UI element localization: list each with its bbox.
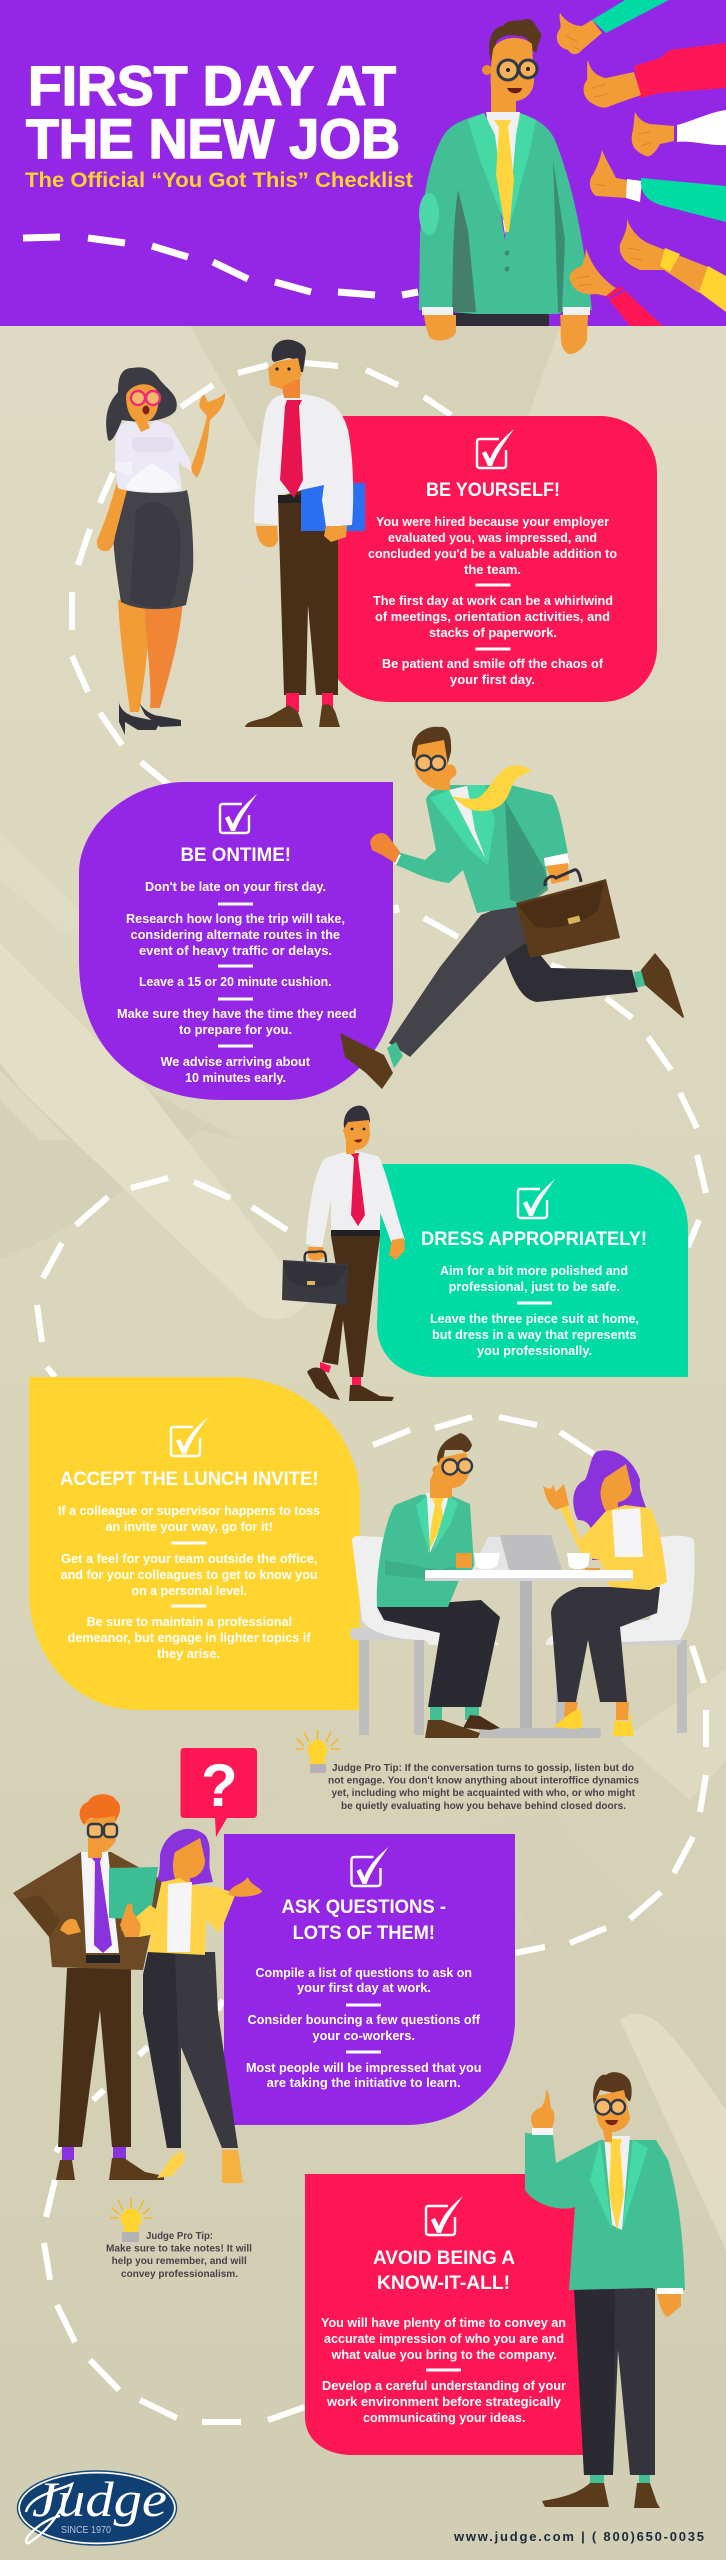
man with orange hair and woman colleague [13, 1794, 262, 2183]
body text: considering alternate routes in the [130, 928, 340, 942]
body text: demeanor, but engage in lighter topics if [68, 1631, 311, 1645]
body text [246, 1966, 482, 2090]
body text: You will have plenty of time to convey an [321, 2316, 566, 2330]
body text [321, 2316, 566, 2425]
body text: your co-workers. [312, 2029, 415, 2043]
laptop [500, 1535, 562, 1570]
heading [373, 2247, 515, 2294]
body text: an invite your way, go for it! [106, 1520, 273, 1534]
table [520, 1580, 532, 1730]
body text [368, 515, 617, 687]
question mark speech bubble [180, 1748, 257, 1837]
icon: checkbox [220, 794, 257, 833]
body text: work environment before strategically [326, 2395, 561, 2409]
running man with briefcase [340, 727, 684, 1089]
body text: Compile a list of questions to ask on [256, 1966, 472, 1980]
body text: communicating your ideas. [363, 2411, 526, 2425]
icon: checkbox [352, 1847, 388, 1886]
man at table [377, 1600, 500, 1707]
icon: lightbulb [110, 2198, 152, 2242]
body text: what value you bring to the company. [330, 2348, 557, 2362]
panel: dress appropriately [377, 1164, 688, 1377]
body text: stacks of paperwork. [429, 626, 557, 640]
judge logo: SINCE 1970 [61, 2524, 111, 2536]
body text: Be patient and smile off the chaos of [382, 657, 604, 671]
header man hands [424, 315, 588, 354]
body text: Don't be late on your first day. [145, 880, 326, 894]
body text: and for your colleagues to get to know you [61, 1568, 318, 1582]
body text: Research how long the trip will take, [126, 912, 345, 926]
heading: LOTS OF THEM! [293, 1922, 435, 1944]
header dashed path [23, 237, 418, 295]
header banner [0, 0, 726, 326]
body text: your first day. [450, 673, 535, 687]
woman at table [551, 1587, 660, 1702]
footer contact: www.judge.com | ( 800)650-0035 [453, 2529, 704, 2544]
tip text: be quietly evaluating how you behave behind closed doors. [341, 1800, 626, 1812]
heading: AVOID BEING A [373, 2247, 515, 2269]
icon: lightbulb [296, 1730, 340, 1773]
icon: checkbox [477, 429, 514, 468]
icon: checkbox [426, 2196, 463, 2235]
body text: Consider bouncing a few questions off [248, 2013, 481, 2027]
tip text: not engage. You don't know anything about interoffice dynamics [328, 1774, 639, 1786]
body text: Leave a 15 or 20 minute cushion. [139, 975, 332, 989]
body text [117, 880, 356, 1085]
man with blue folder [245, 340, 365, 727]
body text: the team. [464, 563, 521, 577]
body text: on a personal level. [132, 1584, 247, 1598]
tip text: Judge Pro Tip: If the conversation turns to gossip, listen but do [332, 1762, 634, 1774]
body text: If a colleague or supervisor happens to toss [58, 1504, 320, 1518]
body text: they arise. [157, 1647, 220, 1661]
body text: concluded you'd be a valuable addition to [368, 547, 617, 561]
cups [474, 1553, 500, 1569]
panel: avoid being a know-it-all [305, 2174, 584, 2455]
woman with red glasses [97, 367, 225, 735]
body text: your first day at work. [297, 1981, 431, 1995]
body text: of meetings, orientation activities, and [375, 610, 610, 624]
body text: Develop a careful understanding of your [322, 2379, 566, 2393]
body text [58, 1504, 320, 1661]
body text: Make sure they have the time they need [117, 1007, 356, 1021]
body text: are taking the initiative to learn. [267, 2076, 461, 2090]
body text: Be sure to maintain a professional [87, 1615, 292, 1629]
judge logo [18, 2471, 176, 2545]
body text: Aim for a bit more polished and [440, 1264, 628, 1278]
body text: to prepare for you. [179, 1023, 292, 1037]
man pointing up [525, 2072, 685, 2508]
lunch table scene [350, 1433, 695, 1738]
body text: Get a feel for your team outside the office, [61, 1552, 318, 1566]
man walking with briefcase [282, 1106, 405, 1401]
dashed journey path [37, 363, 706, 2422]
heading: ASK QUESTIONS - [282, 1896, 446, 1918]
thumbs up hands [557, 0, 726, 326]
title: FIRST DAY AT [28, 54, 396, 117]
body text: 10 minutes early. [185, 1071, 286, 1085]
body text [430, 1264, 639, 1358]
panel: accept the lunch invite [29, 1377, 360, 1710]
panel: be ontime [79, 782, 393, 1100]
body text: Most people will be impressed that you [246, 2061, 482, 2075]
right chair [556, 1635, 687, 1733]
heading: DRESS APPROPRIATELY! [421, 1228, 647, 1250]
tip text: yet, including who might be acquainted with who, or who might [332, 1787, 635, 1799]
pro tip 1 [296, 1730, 639, 1812]
subtitle: The Official “You Got This” Checklist [25, 169, 413, 192]
body text: You were hired because your employer [376, 515, 609, 529]
tip text: convey professionalism. [121, 2268, 238, 2280]
body text: accurate impression of who you are and [324, 2332, 564, 2346]
icon: checkbox [518, 1179, 555, 1218]
table top [425, 1570, 633, 1580]
tip text: help you remember, and will [112, 2255, 247, 2267]
left chair [350, 1628, 424, 1735]
body text: but dress in a way that represents [432, 1328, 637, 1342]
tip text [106, 2230, 252, 2280]
tip text: Make sure to take notes! It will [106, 2242, 252, 2254]
title [26, 54, 400, 170]
panel: be yourself [336, 416, 657, 702]
title: THE NEW JOB [26, 107, 400, 170]
heading: KNOW-IT-ALL! [377, 2272, 510, 2294]
body text: Leave the three piece suit at home, [430, 1312, 639, 1326]
heading [282, 1896, 446, 1944]
body text: We advise arriving about [161, 1055, 311, 1069]
judge logo: Judge [32, 2471, 167, 2527]
tip text [328, 1762, 639, 1812]
icon: checkbox [171, 1417, 208, 1456]
tip text: Judge Pro Tip: [146, 2230, 213, 2242]
question mark speech bubble: ? [201, 1752, 238, 1819]
header man in green suit [419, 19, 592, 326]
panel: ask questions [224, 1834, 515, 2125]
body text: evaluated you, was impressed, and [388, 531, 597, 545]
heading: BE ONTIME! [180, 844, 291, 866]
heading: BE YOURSELF! [426, 479, 560, 501]
body text: event of heavy traffic or delays. [139, 944, 332, 958]
pro tip 2 [106, 2198, 252, 2280]
heading: ACCEPT THE LUNCH INVITE! [60, 1468, 318, 1490]
body text: professional, just to be safe. [449, 1280, 620, 1294]
body text: you professionally. [477, 1344, 592, 1358]
body text: The first day at work can be a whirlwind [373, 594, 613, 608]
